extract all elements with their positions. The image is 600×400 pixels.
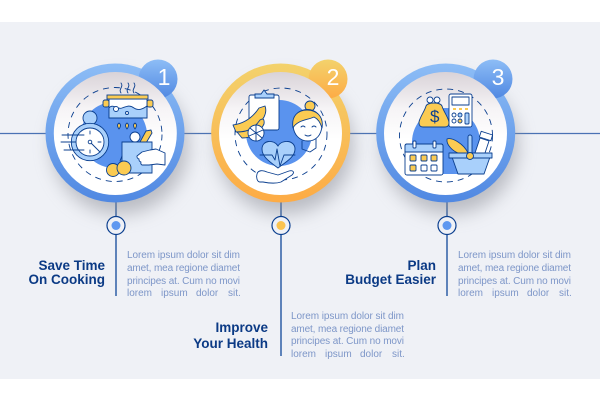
icon: boiling pot — [103, 83, 153, 129]
node marker 2 — [272, 216, 290, 234]
badge 1: 1 — [158, 64, 170, 90]
heading: improve health: Improve — [215, 320, 268, 335]
icon: calendar — [405, 141, 443, 175]
vertical connectors — [116, 200, 447, 356]
icon: woman face — [293, 101, 322, 152]
body text 3: ipsum — [492, 288, 519, 299]
body text 2: dolor — [360, 349, 383, 360]
step 2 circle — [211, 60, 353, 214]
icon group 3 — [400, 89, 493, 182]
icon: grocery bag — [106, 130, 165, 176]
icon: clipboard — [249, 90, 279, 130]
icon: coin purse: $ — [430, 107, 440, 126]
heading: plan budget: Budget Easier — [345, 272, 437, 287]
icon: bananas and citrus — [233, 106, 266, 141]
body text 1: lorem — [127, 288, 152, 299]
badge 2 — [308, 60, 348, 98]
body text 3: amet, mea regione diamet — [458, 263, 571, 274]
badge 3: 3 — [492, 64, 504, 90]
body text 3: principes at. Cum no movi — [458, 276, 571, 287]
badge 2: 2 — [327, 64, 339, 90]
body text 3: dolor — [527, 288, 550, 299]
body text 1: principes at. Cum no movi — [127, 276, 240, 287]
icon: stopwatch — [61, 111, 109, 161]
heading: save time: On Cooking — [28, 272, 105, 287]
node marker 1 — [107, 216, 125, 234]
heading: save time: Save Time — [38, 258, 105, 273]
body text 1: dolor — [196, 288, 219, 299]
icon: heart with pulse — [260, 141, 295, 168]
body text 3: lorem — [458, 288, 483, 299]
step 1 circle — [46, 60, 188, 214]
body text 1: Lorem ipsum dolor sit dim — [127, 250, 240, 261]
body text 2: principes at. Cum no movi — [291, 336, 404, 347]
icon: shopping basket — [447, 131, 493, 174]
body text 2: amet, mea regione diamet — [291, 324, 404, 335]
badge 1 — [138, 60, 178, 98]
badge 3 — [474, 60, 512, 98]
horizontal timeline — [0, 132, 600, 134]
body text 3: sit. — [559, 288, 572, 299]
body text 2: lorem — [291, 349, 316, 360]
body text 2: Lorem ipsum dolor sit dim — [291, 311, 404, 322]
heading: improve health: Your Health — [193, 336, 268, 351]
node marker 3 — [438, 216, 456, 234]
body text 1: sit. — [228, 288, 241, 299]
body text 2: ipsum — [325, 349, 352, 360]
icon group 2 — [233, 88, 327, 183]
body text 1: ipsum — [161, 288, 188, 299]
step 3 circle — [376, 60, 518, 214]
heading: plan budget: Plan — [407, 258, 436, 273]
icon group 1 — [61, 83, 165, 182]
body text 2: sit. — [392, 349, 405, 360]
body text 3: Lorem ipsum dolor sit dim — [458, 250, 571, 261]
body text 1: amet, mea regione diamet — [127, 263, 240, 274]
icon: calculator — [449, 94, 472, 127]
icon: open hand — [257, 171, 293, 183]
